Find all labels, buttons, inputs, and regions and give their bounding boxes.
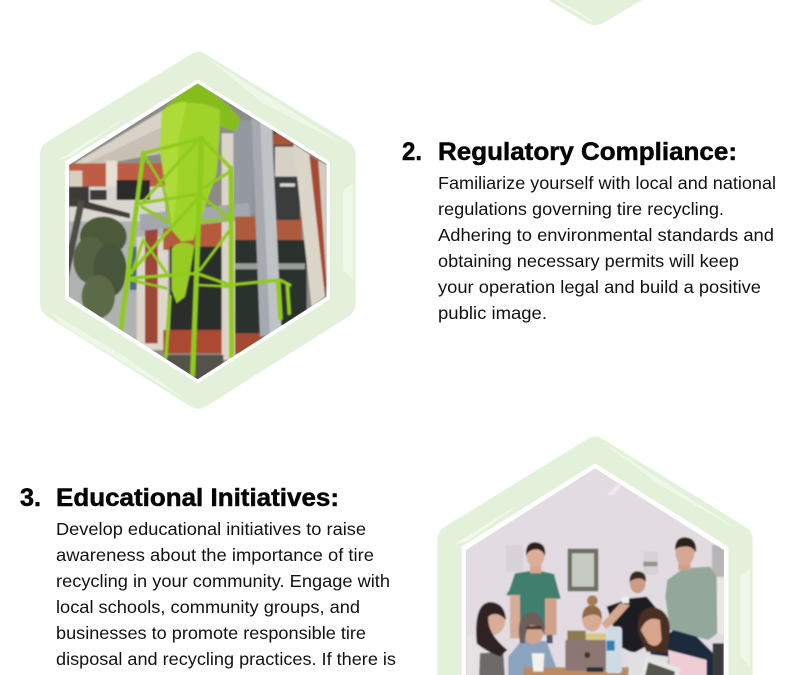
steel frame xyxy=(121,138,290,375)
text block: regulatory compliance body: regulations governing tire recycling. xyxy=(438,199,724,219)
heading: Educational Initiatives: Educational Initiatives: xyxy=(56,484,339,512)
woman at left xyxy=(466,633,507,675)
hexagon photo: cyclone separator xyxy=(40,52,356,409)
picture on wall xyxy=(568,549,598,591)
cyclone body xyxy=(162,83,240,132)
text block: educational initiatives body: recycling in your community. Engage with xyxy=(56,571,390,591)
text block: regulatory compliance body: Familiarize yourself with local and national xyxy=(438,173,776,193)
text block: educational initiatives body: local schools, community groups, and xyxy=(56,597,360,617)
text block: regulatory compliance body: your operation legal and build a positive xyxy=(438,277,761,297)
heading: Regulatory Compliance: Regulatory Compliance: xyxy=(438,138,737,166)
text block: educational initiatives body: businesses to promote responsible tire xyxy=(56,623,366,643)
man in green shirt xyxy=(546,634,554,644)
papers and tablet xyxy=(627,652,668,675)
photo: team at a table xyxy=(463,463,730,675)
hexagon frame xyxy=(437,436,753,675)
tree foliage xyxy=(80,217,127,257)
text block: regulatory compliance body: obtaining necessary permits will keep xyxy=(438,251,739,271)
text block: educational initiatives body: disposal and recycling practices. If there is xyxy=(56,649,396,669)
table and mug xyxy=(523,667,630,675)
woman in glasses and denim xyxy=(508,638,556,675)
woman with bun xyxy=(587,595,598,606)
text block: regulatory compliance body: Adhering to environmental standards and xyxy=(438,225,774,245)
text block: regulatory compliance body xyxy=(438,173,776,323)
heading: Regulatory Compliance: 2. xyxy=(402,138,422,166)
hexagon fragment at top edge xyxy=(548,0,642,25)
text block: educational initiatives body: Develop educational initiatives to raise xyxy=(56,519,366,539)
hexagon frame xyxy=(40,52,356,409)
photo: green cyclone tower xyxy=(58,73,330,383)
woman leaning in front xyxy=(650,630,722,675)
text block: educational initiatives body xyxy=(56,519,396,669)
man in grey sweater xyxy=(665,567,717,640)
hexagon photo: team around a laptop xyxy=(437,436,753,675)
heading: Educational Initiatives: 3. xyxy=(20,484,41,512)
text block: regulatory compliance body: public image. xyxy=(438,303,547,323)
woman standing with cup xyxy=(607,597,670,653)
water bottle xyxy=(606,627,622,673)
text block: educational initiatives body: awareness about the importance of tire xyxy=(56,545,374,565)
laptop xyxy=(565,640,606,671)
